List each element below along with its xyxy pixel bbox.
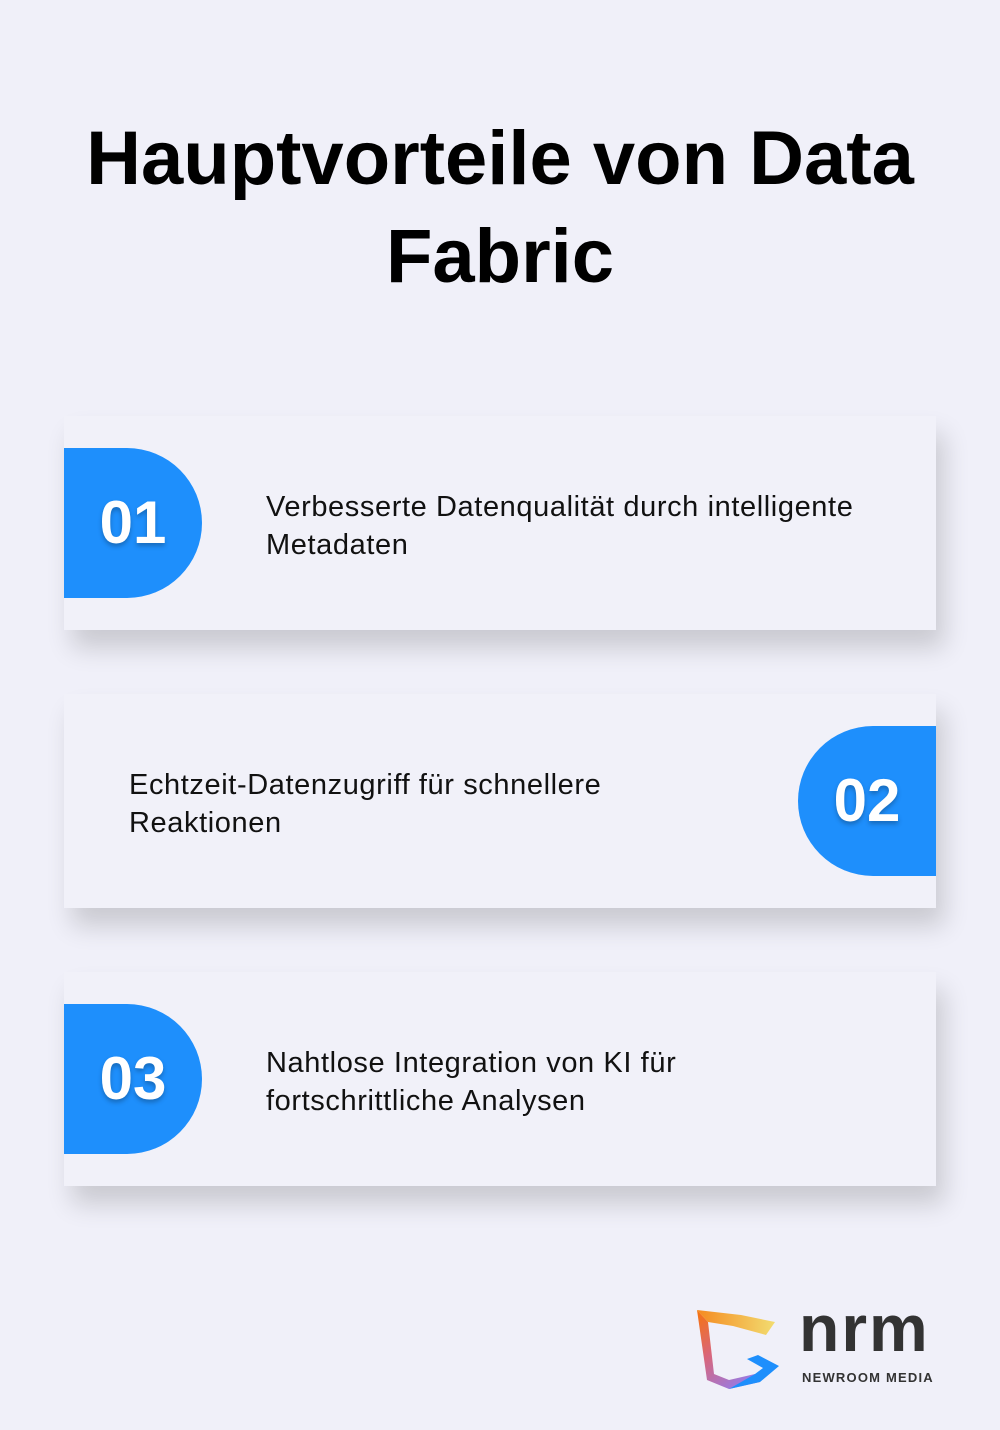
title: Fabric [386, 214, 614, 299]
text 1: Metadaten [266, 529, 408, 561]
card 2 [64, 694, 936, 908]
text 2: Reaktionen [129, 807, 282, 839]
logo [697, 1291, 934, 1389]
text 2 [129, 769, 601, 839]
text 1: Verbesserte Datenqualität durch intelligente [266, 491, 853, 523]
badge 02: 02 [834, 767, 900, 834]
icon: logo mark [697, 1310, 779, 1389]
logo text: nrm [799, 1291, 930, 1365]
text 1 [266, 491, 853, 561]
text 3: Nahtlose Integration von KI für [266, 1047, 676, 1079]
card 1 [64, 416, 936, 630]
logo: NEWROOM MEDIA [802, 1370, 934, 1385]
badge 01 [64, 448, 202, 598]
badge 03: 03 [100, 1045, 166, 1112]
card 3 [64, 972, 936, 1186]
badge 01: 01 [100, 489, 166, 556]
text 3 [266, 1047, 676, 1117]
title [86, 116, 914, 299]
text 3: fortschrittliche Analysen [266, 1085, 586, 1117]
text 2: Echtzeit-Datenzugriff für schnellere [129, 769, 601, 801]
badge 02 [798, 726, 936, 876]
badge 03 [64, 1004, 202, 1154]
title: Hauptvorteile von Data [86, 116, 914, 201]
